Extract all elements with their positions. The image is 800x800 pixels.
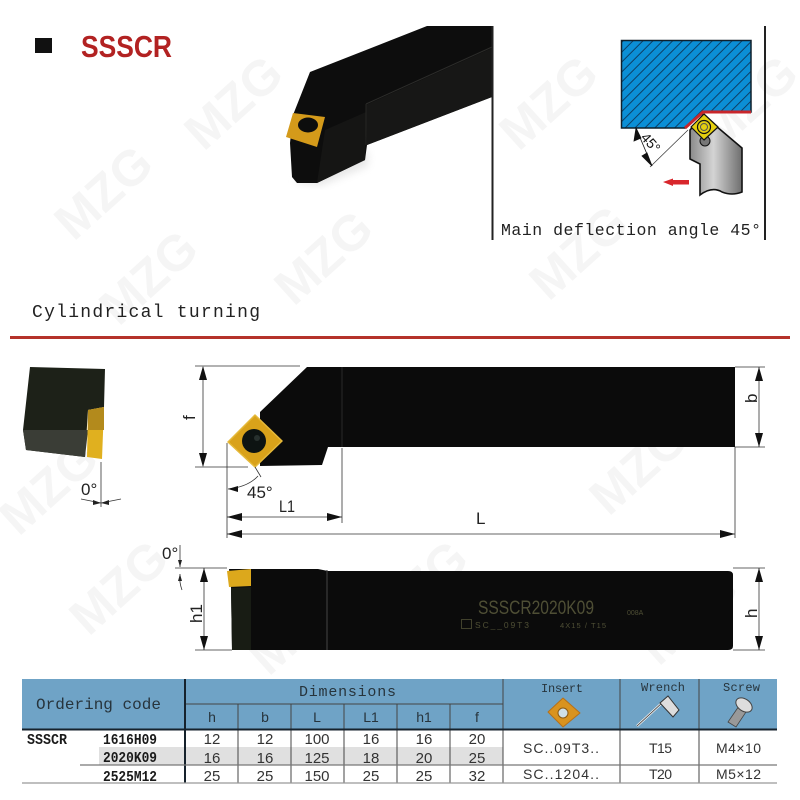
dimension 45 degrees <box>228 467 273 502</box>
row 3 values: 25 <box>204 768 220 785</box>
dimension h: h <box>742 609 761 618</box>
row labels: 2525M12 <box>103 769 157 786</box>
specification table <box>22 679 777 786</box>
feed arrow <box>663 178 689 186</box>
dimension b <box>735 367 765 447</box>
dimension zero degree <box>162 544 182 590</box>
row 3 values: 25 <box>257 768 273 785</box>
row 1 values <box>204 731 485 748</box>
row labels: 2020K09 <box>103 750 157 767</box>
dimension L1 <box>227 443 342 538</box>
product photo: turning tool <box>286 26 492 186</box>
row 2 values <box>204 750 485 767</box>
table lines <box>22 679 777 783</box>
accessory values: T15 <box>649 740 672 756</box>
row labels: SSSCR <box>27 732 67 749</box>
accessory values: M5×12 <box>716 766 761 782</box>
row 3 values: 150 <box>304 768 330 785</box>
dimension zero degree: 0° <box>162 544 178 563</box>
tool body <box>260 367 735 466</box>
section heading: Cylindrical turning <box>32 303 260 323</box>
angle lines <box>650 130 688 167</box>
background watermark: MZG <box>44 134 164 250</box>
side view of tool with dimensions <box>180 366 765 538</box>
dimension L <box>227 447 735 538</box>
header labels <box>36 681 761 725</box>
accessory values: SC..09T3.. <box>523 740 599 756</box>
background watermark: MZG <box>629 559 749 675</box>
dimension f <box>180 366 300 467</box>
engraved marking: 4X15 / T15 <box>560 621 606 630</box>
header labels: f <box>475 709 479 725</box>
engraved marking: SSSCR2020K09 <box>478 598 594 619</box>
row 3 values: 32 <box>469 768 485 785</box>
insert <box>228 415 282 467</box>
row 1 values: 100 <box>304 731 330 748</box>
row 1 values: 12 <box>257 731 273 748</box>
background watermark: MZG <box>579 409 699 525</box>
engraved marking: SC__09T3 <box>475 620 529 630</box>
row labels <box>27 732 157 786</box>
row 2 values: 20 <box>416 750 432 767</box>
icon: screw <box>728 695 755 727</box>
header labels: h <box>208 709 216 725</box>
right divider line <box>764 26 766 240</box>
row 2 values: 125 <box>304 750 330 767</box>
insert screw <box>700 136 710 146</box>
angle label: 45° <box>638 129 664 156</box>
header labels: Screw <box>723 681 761 695</box>
end view of tool <box>23 367 121 507</box>
row 1 values: 16 <box>416 731 432 748</box>
table header background <box>22 679 777 729</box>
dimension h1: h1 <box>187 604 206 623</box>
workpiece <box>622 40 751 128</box>
background watermark: MZG <box>489 44 609 160</box>
cutting diagram <box>622 40 751 195</box>
dimension L1: L1 <box>279 497 295 516</box>
header labels: h1 <box>416 709 432 725</box>
header labels: Insert <box>541 682 583 696</box>
diagram caption: Main deflection angle 45° <box>501 221 761 240</box>
dimension f: f <box>180 415 199 420</box>
shaded row <box>99 747 503 765</box>
background watermark: MZG <box>89 219 209 335</box>
accessory values: M4×10 <box>716 740 761 756</box>
dimension b: b <box>742 394 761 403</box>
header labels: L1 <box>363 709 379 725</box>
dimension 45 degrees: 45° <box>247 483 273 502</box>
background watermark: MZG <box>174 44 294 160</box>
engraved marking <box>462 598 644 630</box>
accessory values <box>523 740 761 782</box>
dimension h1 <box>175 568 232 650</box>
header labels: Wrench <box>641 681 685 695</box>
tool holder <box>690 115 742 195</box>
row 1 values: 16 <box>363 731 379 748</box>
header labels: b <box>261 709 269 725</box>
icon: insert <box>548 698 580 727</box>
header labels: L <box>313 709 321 725</box>
row 2 values: 16 <box>204 750 220 767</box>
insert <box>691 114 718 140</box>
title marker square <box>35 38 52 53</box>
zero degree dimension: 0° <box>81 480 97 499</box>
header labels: Ordering code <box>36 696 161 714</box>
red divider <box>10 336 790 339</box>
accessory values: T20 <box>649 766 672 782</box>
engraved marking: 008A <box>627 610 644 617</box>
dimension h <box>733 568 765 650</box>
row labels: 1616H09 <box>103 732 157 749</box>
background watermark: MZG <box>264 199 384 315</box>
angle arrows <box>634 128 652 166</box>
title: SSSCR <box>81 29 172 64</box>
background watermark: MZG <box>519 194 639 310</box>
machined surface in red <box>685 112 751 128</box>
row 1 values: 12 <box>204 731 220 748</box>
row 2 values: 16 <box>257 750 273 767</box>
row 1 values: 20 <box>469 731 485 748</box>
insert <box>227 569 251 587</box>
header labels: Dimensions <box>299 684 396 701</box>
tool body <box>229 569 733 650</box>
background watermark: MZG <box>59 529 179 645</box>
row 2 values: 18 <box>363 750 379 767</box>
top view of tool with dimensions <box>162 544 765 650</box>
row 3 values <box>204 768 485 785</box>
row 3 values: 25 <box>363 768 379 785</box>
background watermark: MZG <box>239 569 359 685</box>
row 2 values: 25 <box>469 750 485 767</box>
background watermark: MZG <box>359 529 479 645</box>
row 3 values: 25 <box>416 768 432 785</box>
left divider line <box>492 26 494 240</box>
icon: wrench <box>637 696 679 726</box>
dimension L: L <box>476 509 485 528</box>
accessory values: SC..1204.. <box>523 766 599 782</box>
